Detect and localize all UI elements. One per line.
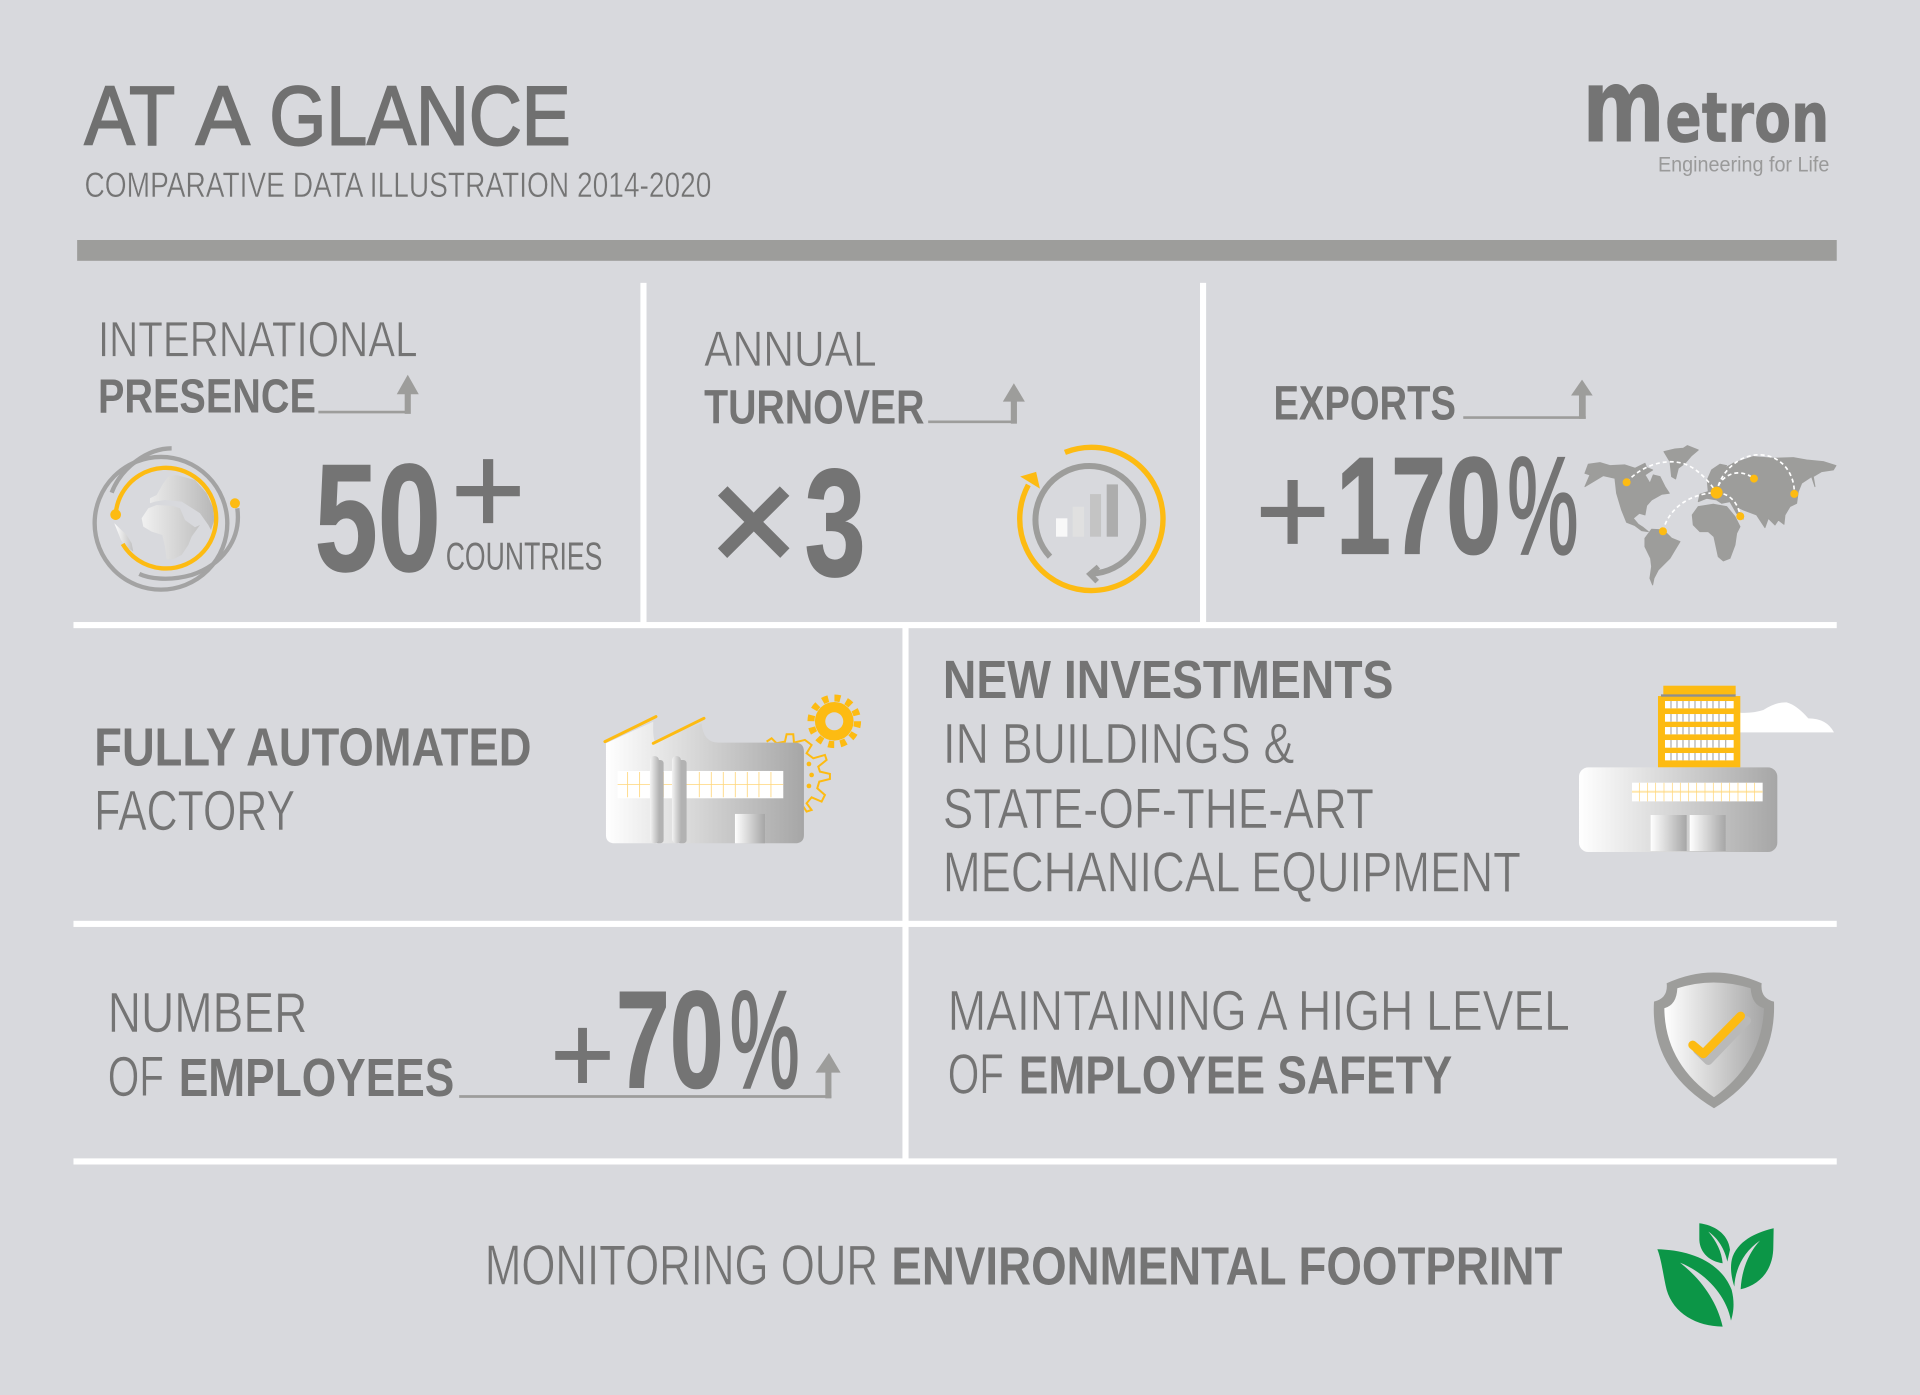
number: times three <box>709 435 866 609</box>
heading: employee safety: MAINTAINING A HIGH LEVEL <box>948 979 1570 1042</box>
heading: new investments <box>943 650 1521 903</box>
icon: world map with routes <box>1585 446 1836 585</box>
heading: international presence <box>98 311 418 424</box>
heading: international presence: PRESENCE <box>98 371 316 424</box>
number: times three: × <box>709 435 798 606</box>
heading: fully automated factory: FULLY AUTOMATED <box>94 717 531 777</box>
heading: environmental footprint <box>485 1233 1563 1296</box>
logo: Metron <box>1582 47 1829 176</box>
number: plus 170 percent: % <box>1507 429 1578 583</box>
plus sign: + <box>451 419 526 562</box>
number: times three: 3 <box>804 438 866 609</box>
heading: number of employees: OF <box>108 1045 164 1108</box>
arrow: turnover up <box>928 383 1025 424</box>
logo: Metron: m <box>1582 47 1665 166</box>
header bar <box>77 240 1837 261</box>
panel: employee safety <box>948 972 1774 1108</box>
icon: globe with orbit rings <box>95 448 240 590</box>
label: countries: COUNTRIES <box>446 535 602 578</box>
title: A <box>196 69 250 162</box>
panel: environmental footprint <box>485 1223 1774 1327</box>
heading: international presence: INTERNATIONAL <box>98 311 418 367</box>
heading: fully automated factory <box>94 717 531 842</box>
panel: new investments <box>943 650 1834 903</box>
title: GLANCE <box>269 69 571 162</box>
icon: green leaves <box>1657 1223 1774 1327</box>
arrow: employees up <box>459 1053 841 1098</box>
heading: number of employees: NUMBER <box>108 981 307 1044</box>
number: plus 70 percent: 70 <box>616 963 724 1117</box>
arrow: exports up <box>1463 380 1593 419</box>
heading: employee safety <box>948 979 1570 1105</box>
icon: office building and cloud <box>1579 686 1834 852</box>
panel: international presence <box>95 311 602 604</box>
panel: number of employees <box>108 963 841 1117</box>
number: plus 70 percent: % <box>730 963 800 1117</box>
heading: new investments: IN BUILDINGS & <box>943 712 1294 775</box>
number: plus 170 percent: 170 <box>1336 429 1501 583</box>
heading: number of employees <box>108 981 454 1108</box>
heading: new investments: STATE-OF-THE-ART <box>943 777 1374 840</box>
number: 50: 50 <box>315 433 441 604</box>
heading: annual turnover: TURNOVER <box>704 382 924 435</box>
icon: circular growth chart <box>1020 447 1163 591</box>
icon: shield with check <box>1654 972 1774 1108</box>
heading: employee safety: OF <box>948 1042 1004 1105</box>
panel: exports <box>1255 377 1836 585</box>
number: plus 70 percent: + <box>550 993 615 1116</box>
panel: annual turnover <box>704 321 1163 609</box>
heading: new investments: NEW INVESTMENTS <box>943 650 1393 710</box>
panel: fully automated factory <box>94 698 858 843</box>
logo: Metron: Engineering for Life <box>1658 153 1829 176</box>
subtitle: COMPARATIVE DATA ILLUSTRATION 2014-2020 <box>84 165 711 205</box>
heading: number of employees: EMPLOYEES <box>179 1048 454 1108</box>
heading: new investments: MECHANICAL EQUIPMENT <box>943 840 1521 903</box>
heading: environmental footprint: MONITORING OUR <box>485 1233 878 1296</box>
title: AT <box>84 69 175 162</box>
number: plus 170 percent: + <box>1255 440 1330 583</box>
heading: fully automated factory: FACTORY <box>94 779 295 842</box>
arrow: presence up <box>318 375 419 414</box>
logo: Metron: etron <box>1665 78 1829 158</box>
number: plus 70 percent <box>550 963 800 1117</box>
heading: employee safety: EMPLOYEE SAFETY <box>1019 1045 1452 1105</box>
heading: annual turnover <box>704 321 924 435</box>
heading: environmental footprint: ENVIRONMENTAL FOOTPRINT <box>891 1236 1563 1296</box>
icon: factory with gears <box>605 698 858 843</box>
heading: exports: EXPORTS <box>1273 377 1456 430</box>
heading: annual turnover: ANNUAL <box>704 321 877 377</box>
title <box>84 69 571 162</box>
